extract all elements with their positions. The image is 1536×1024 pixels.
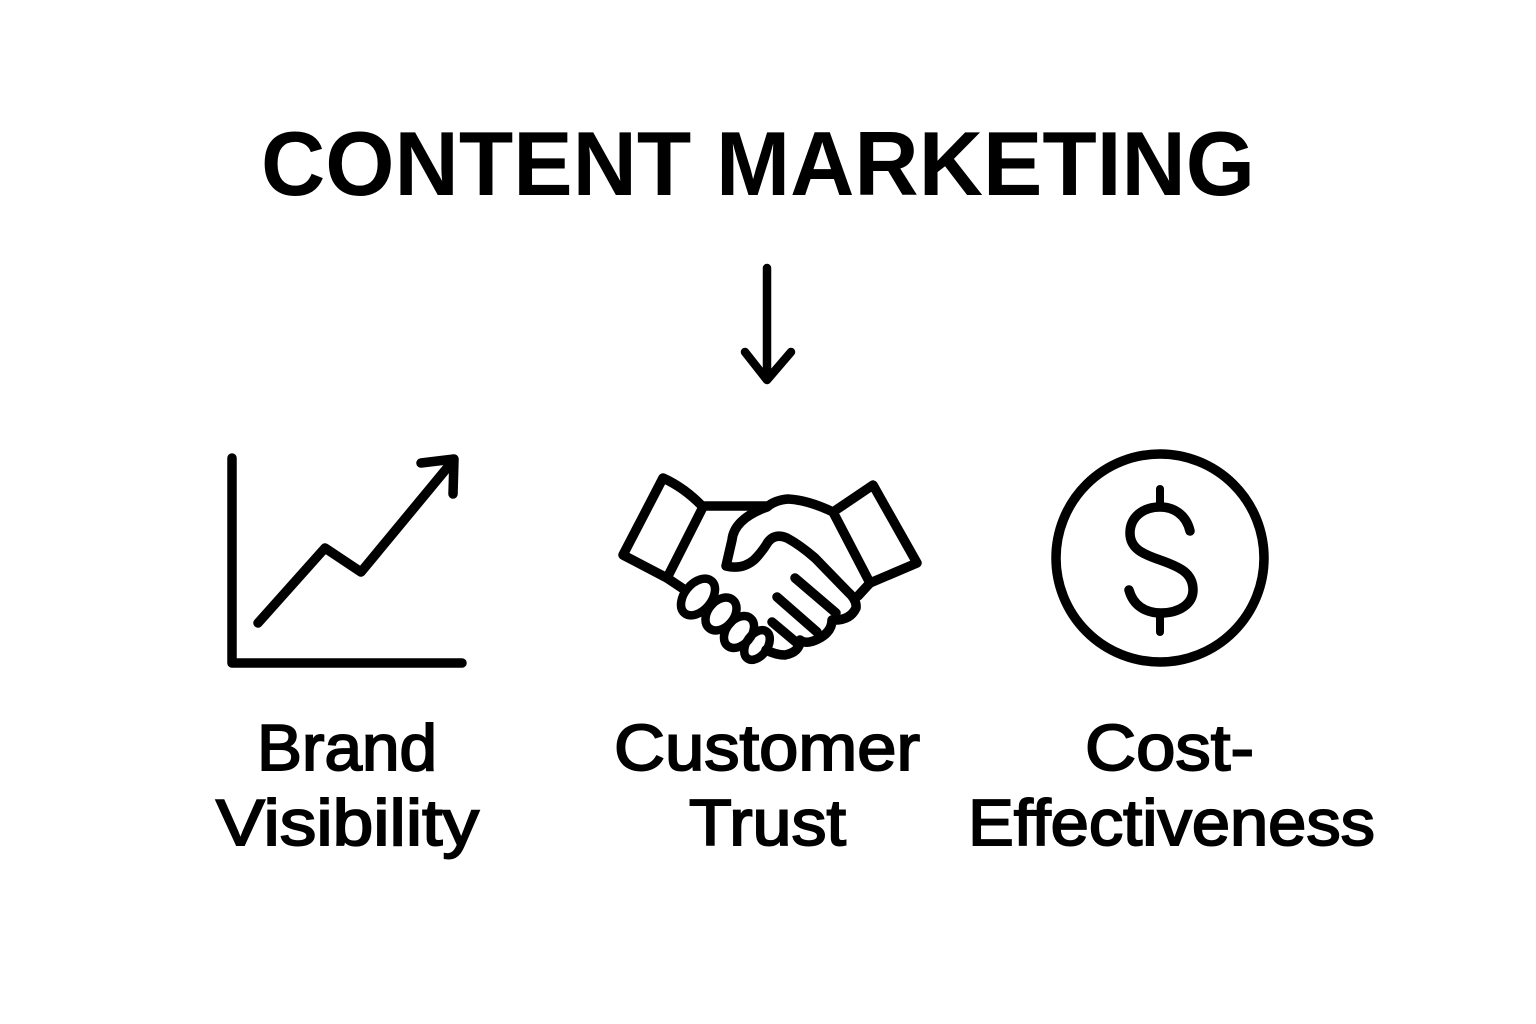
fingers lines	[795, 578, 836, 613]
right cuff	[833, 485, 917, 583]
label: brand visibility: Visibility	[216, 786, 480, 859]
label: cost-effectiveness	[968, 711, 1375, 859]
left hand fingers	[674, 572, 722, 622]
upper sleeve line	[703, 501, 767, 511]
label: customer trust: Trust	[689, 786, 846, 859]
label: brand visibility	[216, 711, 480, 859]
label: cost-effectiveness: Cost-	[1085, 711, 1254, 784]
label: customer trust: Customer	[614, 711, 920, 784]
icon: growth chart	[232, 458, 462, 663]
label: customer trust	[614, 711, 920, 859]
title: CONTENT MARKETING	[261, 114, 1255, 215]
left cuff	[623, 478, 703, 578]
arrow: down	[745, 268, 791, 380]
icon: dollar coin	[1056, 454, 1264, 662]
label: brand visibility: Brand	[257, 711, 437, 784]
right hand	[726, 499, 856, 655]
icon: handshake	[623, 478, 917, 665]
label: cost-effectiveness: Effectiveness	[968, 786, 1375, 859]
